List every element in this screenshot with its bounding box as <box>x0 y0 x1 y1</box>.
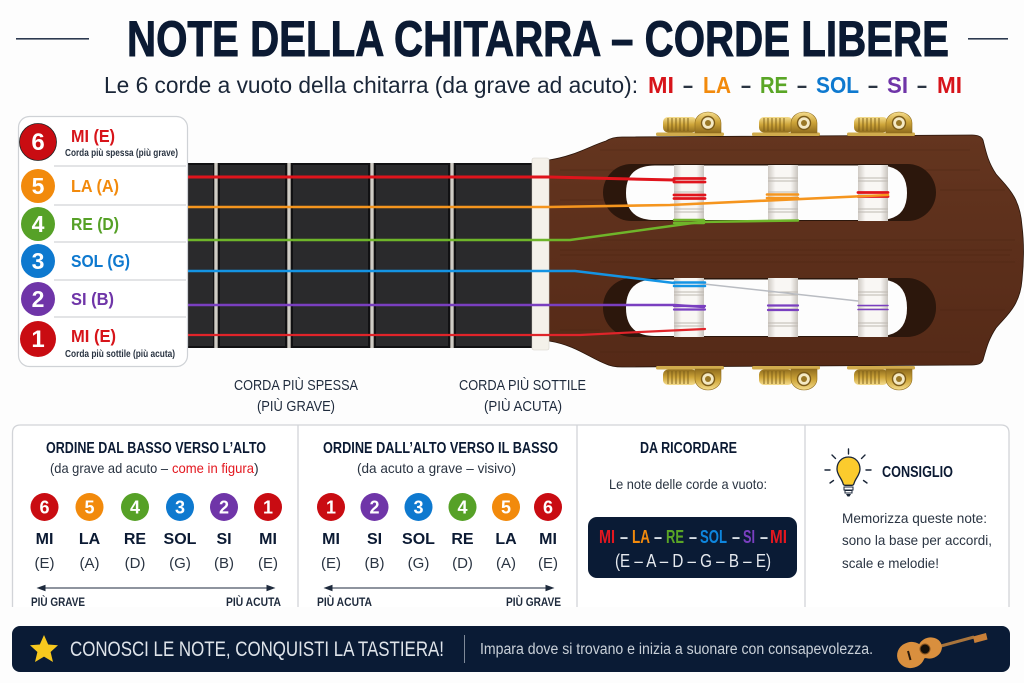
note names: SI <box>367 531 382 548</box>
string 6: red <box>188 177 888 198</box>
string 1 row: MI (E) <box>71 326 116 346</box>
note circles: 6 <box>39 498 50 518</box>
double arrow <box>325 586 553 590</box>
letter names <box>321 555 558 572</box>
string 4 row: RE (D) <box>71 214 119 234</box>
icon: light bulb <box>825 449 871 496</box>
subtitle: open string notes: RE <box>760 72 788 98</box>
dark note box: RE <box>666 527 684 547</box>
axis labels: PIÙ GRAVE <box>506 594 561 609</box>
dark note box: MI <box>599 527 615 547</box>
dark note box: – <box>732 527 740 547</box>
panel: da ricordare: Le note delle corde a vuoto: <box>609 476 767 492</box>
note circles: 1 <box>326 498 336 518</box>
letter names: (G) <box>408 555 429 572</box>
slogan: CONOSCI LE NOTE, CONQUISTI LA TASTIERA! <box>70 638 444 661</box>
dark note box: SOL <box>700 527 727 547</box>
letter names: (D) <box>452 555 473 572</box>
letter names: (E) <box>34 555 54 572</box>
string 2 row: SI (B) <box>71 289 114 309</box>
string 6 row: 6 <box>31 129 45 156</box>
letter names <box>34 555 278 572</box>
string legend panel <box>18 116 188 366</box>
string 3 row <box>21 244 130 278</box>
string 5 row <box>21 169 119 203</box>
double arrow <box>38 586 274 590</box>
panel: bottom to top order: come in figura <box>172 460 254 476</box>
note names <box>36 531 277 548</box>
icon: guitar <box>894 633 988 671</box>
string 3 row: SOL (G) <box>71 251 130 271</box>
subtitle: open string notes: LA <box>703 72 731 98</box>
string 4: green <box>188 220 798 240</box>
footer banner <box>12 626 1010 672</box>
tuners: top <box>656 112 915 136</box>
panel: bottom to top order: (da grave ad acuto – <box>50 460 168 476</box>
panel: bottom to top order <box>30 440 282 609</box>
string 2 row: 2 <box>32 286 44 312</box>
dark note box: LA <box>632 527 650 547</box>
note circles: 1 <box>263 498 273 518</box>
note names: MI <box>322 531 340 548</box>
note circles <box>317 493 562 521</box>
string 1 row <box>20 321 175 360</box>
icon: star <box>30 635 58 662</box>
tip text <box>842 510 992 571</box>
string 6 row: MI (E) <box>71 126 115 146</box>
subtitle: open string notes: – <box>868 72 878 98</box>
note circles <box>30 493 282 521</box>
panel: top to bottom order <box>317 440 562 609</box>
note circles: 3 <box>413 498 424 518</box>
dark note box: – <box>760 527 768 547</box>
axis labels: PIÙ GRAVE <box>31 594 85 609</box>
letter names: (A) <box>80 555 100 572</box>
string 3: blue <box>188 271 858 301</box>
caption: thickest string: (PIÙ GRAVE) <box>257 398 335 415</box>
dark note box: – <box>689 527 697 547</box>
dark note box: – <box>654 527 662 547</box>
axis labels: PIÙ ACUTA <box>226 594 281 609</box>
string 3 row: 3 <box>32 248 44 274</box>
dark note box <box>588 517 797 578</box>
note names: LA <box>79 531 101 548</box>
panel: da ricordare <box>588 440 797 578</box>
string 1 row: Corda più sottile (più acuta) <box>65 348 175 360</box>
panel: bottom to top order: ) <box>254 460 259 476</box>
note circles: 6 <box>543 498 553 518</box>
note circles: 3 <box>175 498 185 518</box>
dark note box: – <box>620 527 628 547</box>
string 2 row <box>21 282 114 316</box>
panel: top to bottom order: ORDINE DALL’ALTO VERSO IL BASSO <box>323 440 558 457</box>
nut <box>532 158 549 350</box>
headstock <box>549 135 1024 367</box>
panel: bottom to top order: ORDINE DAL BASSO VERSO L’ALTO <box>46 440 266 457</box>
note circles: 4 <box>130 498 140 518</box>
letter names: (D) <box>125 555 145 572</box>
subtitle: open string notes: Le 6 corde a vuoto della chitarra (da grave ad acuto): <box>104 72 638 98</box>
tip text: Memorizza queste note: <box>842 510 987 526</box>
dark note box: SI <box>743 527 755 547</box>
string 5 row: 5 <box>32 173 45 199</box>
subtitle: open string notes: – <box>917 72 927 98</box>
note circles: 5 <box>501 498 511 518</box>
subtitle: open string notes: SI <box>887 72 908 98</box>
letter names: (E) <box>258 555 278 572</box>
fretboard <box>188 163 533 348</box>
note names: RE <box>124 531 146 548</box>
note circles: 4 <box>457 498 468 518</box>
string 6 row <box>20 124 178 160</box>
note names: SI <box>216 531 232 548</box>
subtitle: open string notes: SOL <box>816 72 859 98</box>
info panel frame <box>12 425 1009 607</box>
panel: consiglio: CONSIGLIO <box>882 464 953 481</box>
note circles: 5 <box>84 498 95 518</box>
caption: thinnest string: CORDA PIÙ SOTTILE <box>459 377 586 394</box>
note names: SOL <box>164 531 197 548</box>
subtitle: open string notes: MI <box>937 72 962 98</box>
bottom slot <box>603 278 936 337</box>
letter names: (G) <box>169 555 191 572</box>
axis labels: PIÙ ACUTA <box>317 594 372 609</box>
dark note box: MI <box>770 527 787 547</box>
tuning posts <box>674 165 888 337</box>
note circles: 2 <box>369 498 380 518</box>
string 6 row: Corda più spessa (più grave) <box>65 147 178 159</box>
letter names: (E) <box>538 555 558 572</box>
note names: RE <box>451 531 474 548</box>
letter names: (B) <box>214 555 234 572</box>
subtitle: open string notes: MI <box>648 72 674 98</box>
string 2: purple <box>188 305 888 310</box>
dark note box: (E – A – D – G – B – E) <box>615 551 771 571</box>
letter names: (E) <box>321 555 341 572</box>
string 4 row: 4 <box>32 211 45 237</box>
tip text: scale e melodie! <box>842 555 939 571</box>
string 5 row: LA (A) <box>71 176 119 196</box>
top slot <box>603 164 936 221</box>
strings <box>188 177 888 335</box>
string 1 row: 1 <box>31 326 45 353</box>
note names: MI <box>259 531 277 548</box>
subtitle: open string notes: – <box>797 72 807 98</box>
panel: consiglio <box>825 449 992 571</box>
string 1: red <box>188 329 705 335</box>
caption: thickest string: CORDA PIÙ SPESSA <box>234 377 358 394</box>
tip text: sono la base per accordi, <box>842 532 992 548</box>
subtitle: open string notes: – <box>741 72 751 98</box>
note names: MI <box>36 531 53 548</box>
subtitle: open string notes: – <box>683 72 693 98</box>
panel: top to bottom order: (da acuto a grave – visivo) <box>357 460 516 476</box>
string 4 row <box>21 207 119 241</box>
caption: thinnest string: (PIÙ ACUTA) <box>484 398 562 415</box>
note names <box>322 531 557 548</box>
caption: thickest string <box>234 377 358 415</box>
note names: SOL <box>402 531 435 548</box>
footer message: Impara dove si trovano e inizia a suonare con consapevolezza. <box>480 641 873 658</box>
note names: MI <box>539 531 557 548</box>
panel: da ricordare: DA RICORDARE <box>640 440 737 457</box>
caption: thinnest string <box>459 377 586 415</box>
axis labels <box>317 594 561 609</box>
tuners: bottom <box>656 366 915 390</box>
subtitle: open string notes <box>104 72 962 98</box>
string 5: orange <box>188 194 888 207</box>
letter names: (B) <box>364 555 384 572</box>
letter names: (A) <box>496 555 516 572</box>
note circles: 2 <box>219 498 229 518</box>
note names: LA <box>495 531 517 548</box>
axis labels <box>31 594 281 609</box>
